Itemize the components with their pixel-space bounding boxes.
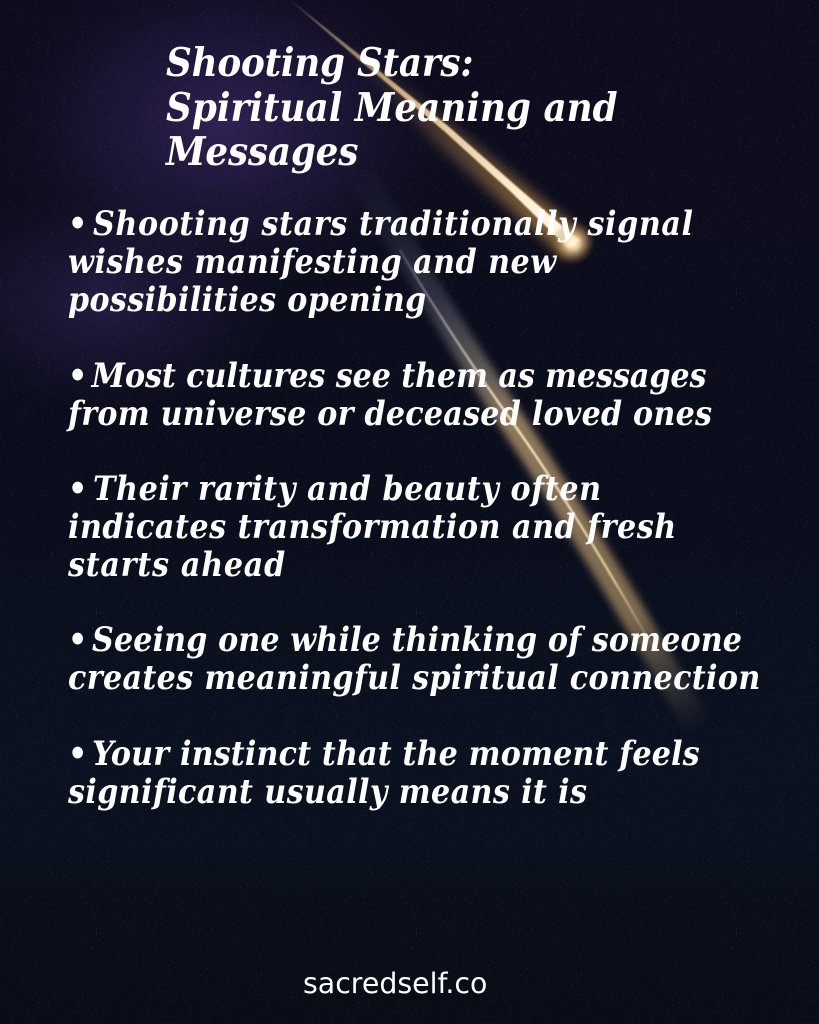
title (165, 40, 618, 175)
bullet 3 (68, 469, 677, 584)
bullet 1: • Shooting stars traditionally signal (68, 204, 694, 243)
footer: website: sacredself.co (303, 967, 487, 1000)
bullet 1: wishes manifesting and new (68, 242, 557, 281)
bullet 4 (68, 620, 761, 697)
bullet 1: possibilities opening (68, 280, 427, 319)
bullet 2 (66, 356, 712, 433)
bullet 5 (68, 734, 700, 811)
bullet 4: creates meaningful spiritual connection (68, 658, 761, 697)
bullet 5: • Your instinct that the moment feels (68, 734, 700, 773)
bullet 5: significant usually means it is (68, 772, 587, 811)
bullet 3: starts ahead (68, 545, 286, 584)
title: Shooting Stars: (166, 40, 473, 86)
bullet 3: indicates transformation and fresh (68, 507, 677, 546)
bullet 2: from universe or deceased loved ones (68, 394, 712, 433)
bullet 3: • Their rarity and beauty often (68, 469, 602, 508)
bullet 2: • Most cultures see them as messages (68, 356, 706, 395)
title: Messages (166, 129, 358, 175)
bullet 1 (68, 204, 694, 319)
title: Spiritual Meaning and (166, 84, 618, 130)
bullet 4: • Seeing one while thinking of someone (68, 620, 742, 659)
